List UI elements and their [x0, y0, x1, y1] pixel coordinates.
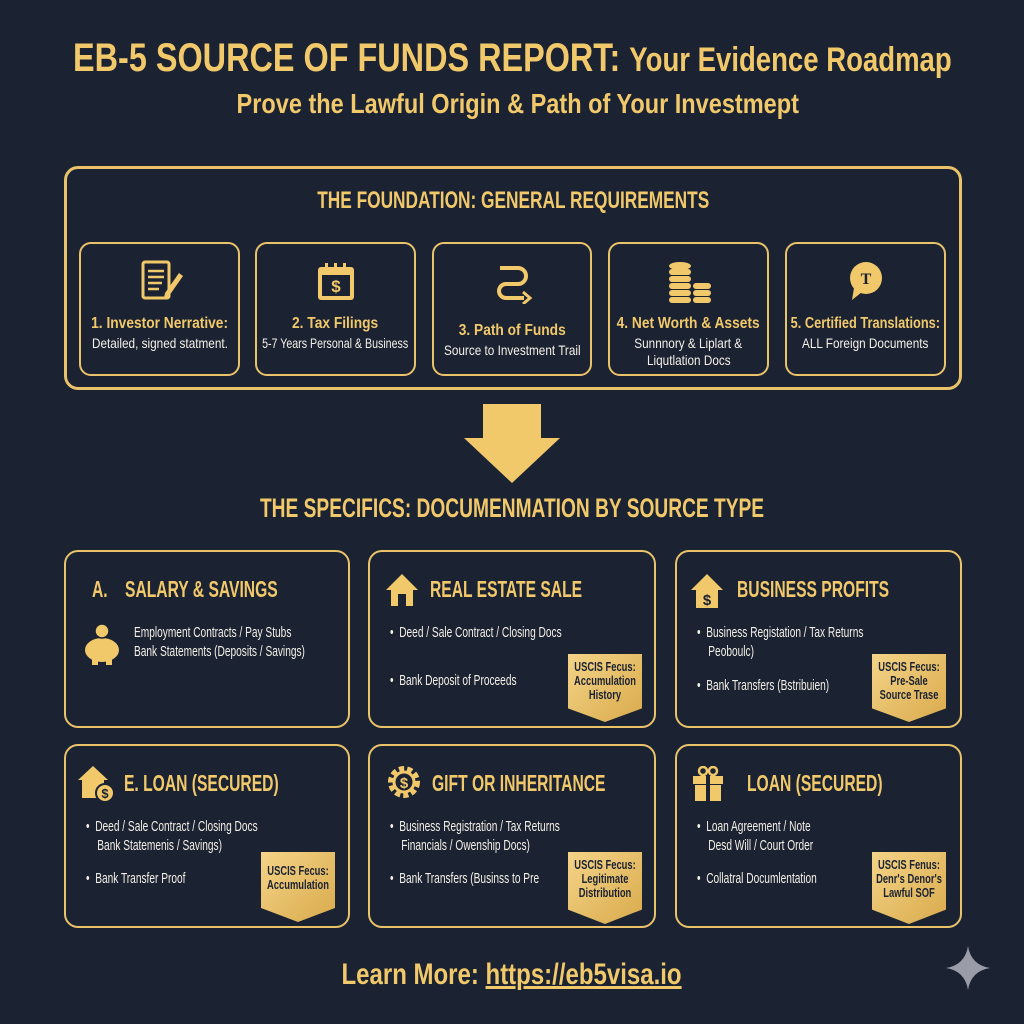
panel: loan secured: • Collatral Documlentation	[697, 871, 817, 887]
panel: loan secured: Desd Will / Court Order	[708, 838, 813, 854]
card: net worth	[608, 242, 769, 376]
icon: house	[386, 574, 418, 606]
panel: gift: Financials / Owenship Docs)	[401, 838, 530, 854]
icon: house dollar: $	[703, 592, 712, 609]
panel: salary: Employment Contracts / Pay Stubs	[134, 625, 291, 641]
badge	[568, 654, 642, 722]
panel: business profits: Peoboulc)	[708, 644, 754, 660]
badge	[568, 852, 642, 924]
icon: piggy bank	[85, 624, 119, 665]
card: tax filings: 2. Tax Filings	[292, 315, 379, 332]
card: investor narrative: Detailed, signed statment.	[92, 335, 227, 351]
panel: real estate: • Deed / Sale Contract / Closing Docs	[390, 625, 562, 641]
card: investor narrative: 1. Investor Nerrative:	[91, 315, 228, 332]
badge: USCIS Fecus:	[574, 857, 636, 872]
card: investor narrative	[79, 242, 240, 376]
panel: loan secured: • Loan Agreement / Note	[697, 819, 811, 835]
panel: loan secured E	[64, 744, 350, 928]
badge: USCIS Fecus:	[574, 659, 636, 674]
panel: business profits: BUSINESS PROFITS	[737, 576, 889, 602]
title: EB-5 SOURCE OF FUNDS REPORT: Your Evidence Roadmap	[73, 36, 951, 80]
footer link: Learn More: https://eb5visa.io	[342, 958, 682, 991]
card: net worth: Liqutlation Docs	[647, 352, 730, 368]
icon: house coin	[78, 766, 113, 801]
badge	[872, 654, 946, 722]
panel: business profits: • Bank Transfers (Bstribuien)	[697, 678, 829, 694]
icon: sparkle	[946, 946, 990, 990]
panel: loan secured E: Bank Statemenis / Savings)	[97, 838, 222, 854]
panel: gift	[368, 744, 656, 928]
badge: Legitimate	[582, 871, 628, 886]
heading: foundation: THE FOUNDATION: GENERAL REQUIREMENTS	[317, 187, 709, 214]
icon: house dollar	[691, 574, 723, 609]
panel: loan secured E: • Bank Transfer Proof	[86, 871, 185, 887]
badge: Lawful SOF	[883, 885, 935, 900]
panel: salary	[64, 550, 350, 728]
icon: gift	[693, 766, 723, 801]
badge: Accumulation	[574, 673, 636, 688]
icon: gear dollar	[388, 766, 420, 798]
card: tax filings	[255, 242, 416, 376]
arrow: down	[464, 404, 560, 483]
panel: gift: • Business Registration / Tax Returns	[390, 819, 560, 835]
badge: USCIS Fecus:	[878, 659, 940, 674]
panel: business profits	[675, 550, 962, 728]
panel: gift: GIFT OR INHERITANCE	[432, 770, 605, 796]
panel: loan secured	[675, 744, 962, 928]
panel: real estate: REAL ESTATE SALE	[430, 576, 582, 602]
card: translations	[785, 242, 946, 376]
panel: loan secured: LOAN (SECURED)	[747, 770, 883, 796]
card: net worth: 4. Net Worth & Assets	[617, 315, 760, 332]
badge: History	[589, 687, 621, 702]
card: translations: 5. Certified Translations:	[791, 315, 940, 332]
icon: house coin: $	[101, 786, 109, 801]
heading: specifics: THE SPECIFICS: DOCUMENMATION BY SOURCE TYPE	[260, 493, 764, 523]
card: tax filings: $	[331, 277, 341, 296]
panel: real estate	[368, 550, 656, 728]
badge: Pre-Sale	[890, 673, 928, 688]
badge: USCIS Fecus:	[267, 863, 329, 878]
panel: business profits: • Business Registation / Tax Returns	[697, 625, 863, 641]
card: path of funds: Source to Investment Trail	[444, 342, 580, 358]
panel: loan secured E: E. LOAN (SECURED)	[124, 770, 279, 796]
badge: Distribution	[579, 885, 631, 900]
panel: real estate: • Bank Deposit of Proceeds	[390, 673, 517, 689]
icon: gear dollar: $	[400, 775, 409, 792]
card: path of funds	[432, 242, 592, 376]
panel: salary: A. SALARY & SAVINGS	[92, 576, 278, 602]
card: translations: T	[860, 271, 871, 288]
badge: Denr's Denor's	[876, 871, 942, 886]
card: translations: ALL Foreign Documents	[802, 335, 929, 351]
panel: foundation	[64, 166, 962, 390]
badge: USCIS Fenus:	[878, 857, 940, 872]
subtitle: Prove the Lawful Origin & Path of Your Investmept	[237, 88, 799, 119]
badge: Accumulation	[267, 877, 329, 892]
card: tax filings: 5-7 Years Personal & Business	[262, 335, 409, 351]
panel: salary: Bank Statements (Deposits / Savings)	[134, 644, 305, 660]
badge: Source Trase	[880, 687, 938, 702]
card: path of funds: 3. Path of Funds	[458, 322, 566, 339]
panel: gift: • Bank Transfers (Businss to Pre	[390, 871, 539, 887]
panel: loan secured E: • Deed / Sale Contract / Closing Docs	[86, 819, 258, 835]
card: net worth: Sunnnory & Liplart &	[635, 335, 742, 351]
badge	[872, 852, 946, 924]
badge	[261, 852, 335, 922]
